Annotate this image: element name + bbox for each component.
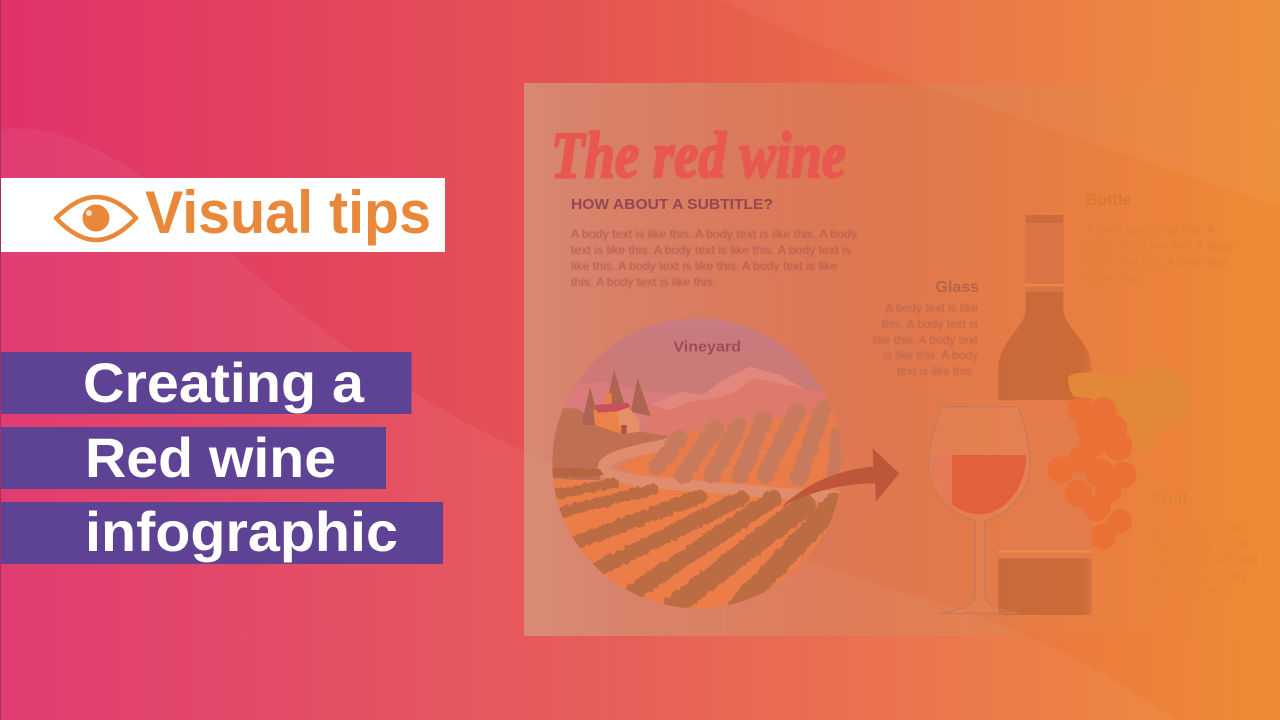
foreground field [550,478,840,610]
panel: faded red wine infographic preview [524,83,1280,636]
bottle caption: text is like this. A body text [1086,255,1227,269]
glass caption: like this. A body text [873,333,979,347]
back field [620,410,842,491]
far pink hills [564,382,704,432]
icon: eye [56,197,136,240]
headline line 2 [1,426,386,489]
glass caption [873,279,979,378]
vineyard label: Vineyard [673,338,741,355]
headline line 3: infographic [85,500,398,563]
arrow to glass [782,448,899,507]
glass caption: text is like this. [897,364,975,378]
grape bunch [1047,397,1137,549]
headline line 2: Red wine [85,426,336,489]
glass caption: Glass [935,279,979,296]
fruit caption: this. A body text is [1152,537,1248,551]
bottle caption [1086,192,1233,285]
intro body text: this. A body text is like this. [571,275,716,289]
bottle caption: A body text is like this. A [1086,223,1215,237]
intro body text: like this. A body text is like this. A body text is like [571,259,837,273]
headline line 1: Creating a [83,351,365,414]
front vine rows [553,473,835,607]
intro body text [571,227,857,289]
fruit caption: Fruit [1152,490,1188,507]
mountain [642,378,832,440]
left hill [550,408,668,480]
wine glass [929,407,1030,613]
river [603,443,840,497]
bottle caption: body text is like this. A body [1086,239,1233,253]
glass caption: A body text is like [885,301,978,315]
fruit caption: A body text is like [1152,521,1245,535]
infographic title: The red wine [551,119,846,192]
fruit caption [1152,490,1258,599]
glass caption: this. A body text is [882,317,978,331]
bottle caption: is like this. [1086,271,1141,285]
intro body text: text is like this. A body text is like this. A body text is [571,243,851,257]
wine bottle, glass and grapes [929,215,1191,615]
banner text: Visual tips [145,179,431,246]
fruit caption: like this. A body text [1152,553,1258,567]
fruit caption: text is like this. [1152,585,1230,599]
fruit caption: is like this. A body [1152,569,1247,583]
bottle [998,215,1092,615]
back vine rows [657,408,837,478]
vineyard illustration [550,317,899,610]
grape leaves [1068,366,1191,455]
bottle caption: Bottle [1086,192,1131,209]
headline line 3 [1,500,443,564]
farmhouse and trees [581,369,651,434]
sky [574,318,838,428]
banner: Visual tips [1,178,445,252]
intro body text: A body text is like this. A body text is like this. A body [571,227,857,241]
headline line 1 [1,351,412,414]
headline: Creating a Red wine infographic [1,351,443,564]
infographic subtitle: HOW ABOUT A SUBTITLE? [571,197,773,213]
glass caption: is like this. A body [883,348,978,362]
